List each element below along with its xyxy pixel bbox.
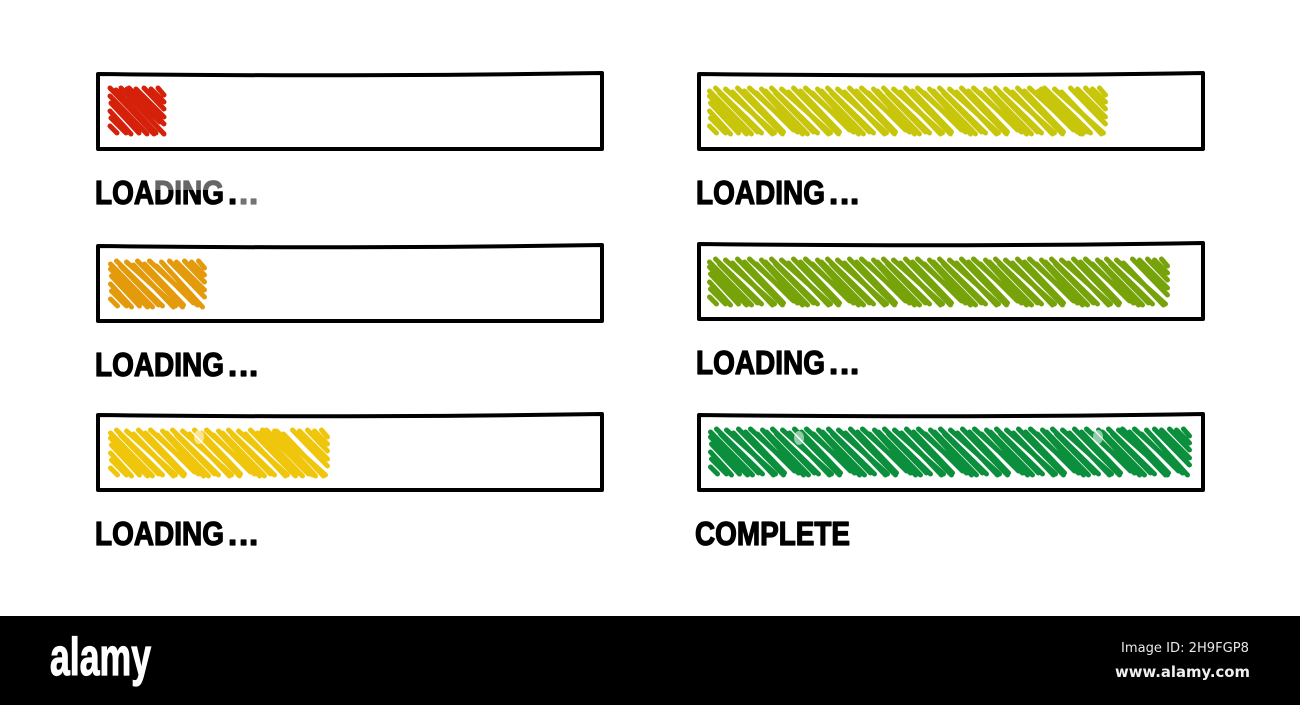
footer band — [0, 616, 1300, 705]
scribble fill: yellow — [110, 430, 328, 476]
website: www.alamy.com — [1115, 663, 1250, 681]
panel: loading bar 4 (olive) — [696, 73, 1203, 211]
image id: Image ID: 2H9FGP8 — [1121, 640, 1249, 656]
bar frame — [98, 73, 602, 149]
panel: loading bar 6 (dark green, complete) — [695, 414, 1203, 552]
scribble fill: dark green — [710, 429, 1190, 475]
bar frame — [699, 414, 1203, 490]
label: COMPLETE — [695, 515, 850, 552]
label: LOADING — [95, 174, 224, 211]
panel: loading bar 1 (red) — [95, 73, 602, 211]
label: LOADING — [95, 515, 224, 552]
label: LOADING — [95, 346, 224, 383]
scribble fill: green — [710, 259, 1168, 305]
bar frame — [699, 73, 1203, 149]
scribble fill: red — [110, 88, 164, 134]
label: ... — [228, 515, 258, 552]
label: ... — [829, 344, 859, 381]
scribble fill: olive yellow — [710, 88, 1106, 134]
label: LOADING — [696, 174, 825, 211]
panel: loading bar 2 (orange) — [95, 245, 602, 383]
label: ... — [228, 346, 258, 383]
panel: loading bar 5 (green) — [696, 243, 1203, 381]
label: ... — [228, 174, 258, 211]
scribble fill: orange — [110, 261, 204, 307]
panel: loading bar 3 (yellow) — [95, 414, 602, 552]
label: LOADING — [696, 344, 825, 381]
label: ... — [829, 174, 859, 211]
bar frame — [699, 243, 1203, 319]
bar frame — [98, 414, 602, 490]
logo: alamy: alamy — [50, 628, 151, 687]
bar frame — [98, 245, 602, 321]
